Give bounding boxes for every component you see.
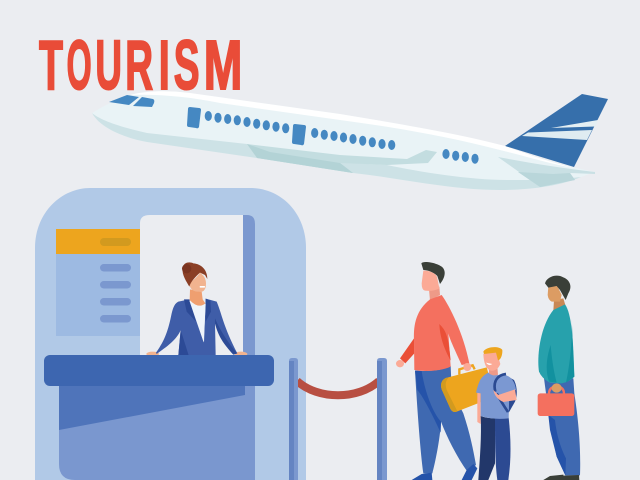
man trousers <box>415 366 476 473</box>
bag body <box>538 393 574 416</box>
plane stabilizer <box>498 157 595 187</box>
doorway side strip <box>243 215 255 386</box>
bag handle <box>549 387 564 394</box>
second man sweater <box>538 304 574 383</box>
barrier post left <box>289 358 298 480</box>
plane windows <box>205 111 479 164</box>
man in red sweater <box>396 262 477 480</box>
man neck <box>429 287 440 301</box>
man front hand <box>463 363 471 371</box>
title: I <box>159 26 170 104</box>
travellers <box>396 262 580 480</box>
title <box>39 26 242 104</box>
barrier rope <box>297 381 379 395</box>
second man trouser shadow <box>548 415 566 475</box>
boy <box>476 347 517 480</box>
board header <box>56 229 140 254</box>
man face <box>422 271 439 291</box>
backpack <box>504 377 517 413</box>
receptionist hair <box>183 262 207 287</box>
queue barrier <box>289 358 387 480</box>
second man hand <box>552 383 562 393</box>
plane fuselage <box>92 91 595 190</box>
yellow suitcase <box>441 363 495 412</box>
plane lower belly shading <box>257 158 581 190</box>
suitcase body <box>441 367 495 412</box>
title: R <box>125 26 153 104</box>
receptionist hair bun <box>182 264 191 273</box>
second man trousers <box>544 378 580 475</box>
plane wing <box>247 144 437 173</box>
backpack straps <box>495 374 508 412</box>
suitcase shadow <box>441 377 457 412</box>
man shoes <box>412 464 477 480</box>
boy t-shirt <box>476 373 516 419</box>
boy hair <box>483 347 502 360</box>
boy trousers left <box>478 416 495 480</box>
title: U <box>95 26 122 104</box>
boy arm left <box>477 392 481 424</box>
man in teal sweater <box>538 276 580 480</box>
board list <box>56 254 140 336</box>
title: M <box>204 26 242 104</box>
receptionist hands <box>146 352 247 356</box>
barrier post right <box>377 358 387 480</box>
boy trousers right <box>495 418 511 480</box>
cockpit windows <box>109 95 154 107</box>
receptionist neck <box>190 289 205 306</box>
check-in booth wall <box>35 188 306 480</box>
title: T <box>39 26 63 104</box>
receptionist face <box>189 273 206 292</box>
suitcase handle <box>459 365 475 375</box>
boy arm <box>493 389 517 402</box>
red bag <box>538 383 574 416</box>
departures board <box>56 229 140 336</box>
man trouser shadow <box>415 371 441 433</box>
man hair <box>421 262 445 284</box>
plane belly shading <box>92 113 257 158</box>
second man hair <box>545 276 570 300</box>
airplane <box>92 91 608 190</box>
receptionist <box>146 262 247 356</box>
second man face <box>548 286 562 302</box>
receptionist jacket <box>156 299 237 355</box>
plane doors <box>187 107 306 145</box>
man back hand <box>396 360 404 367</box>
boy smile <box>486 363 492 365</box>
plane top highlight <box>130 91 574 168</box>
second man shoes <box>543 475 579 480</box>
second man neck <box>553 298 565 311</box>
boy face <box>483 352 500 371</box>
plane tail fin <box>505 94 608 167</box>
title: O <box>67 26 92 104</box>
counter base <box>59 386 255 480</box>
title: S <box>174 26 200 104</box>
second man sweater shadow <box>547 318 574 383</box>
receptionist smile <box>200 286 205 288</box>
receptionist jacket shadows <box>178 299 237 355</box>
boy neck <box>489 367 498 375</box>
counter shadow <box>59 386 245 430</box>
man back arm <box>400 338 414 363</box>
counter top <box>44 355 274 386</box>
receptionist shirt <box>189 301 206 342</box>
man sweater <box>414 295 469 371</box>
man sweater shadow <box>439 324 451 361</box>
booth doorway opening <box>140 215 243 355</box>
